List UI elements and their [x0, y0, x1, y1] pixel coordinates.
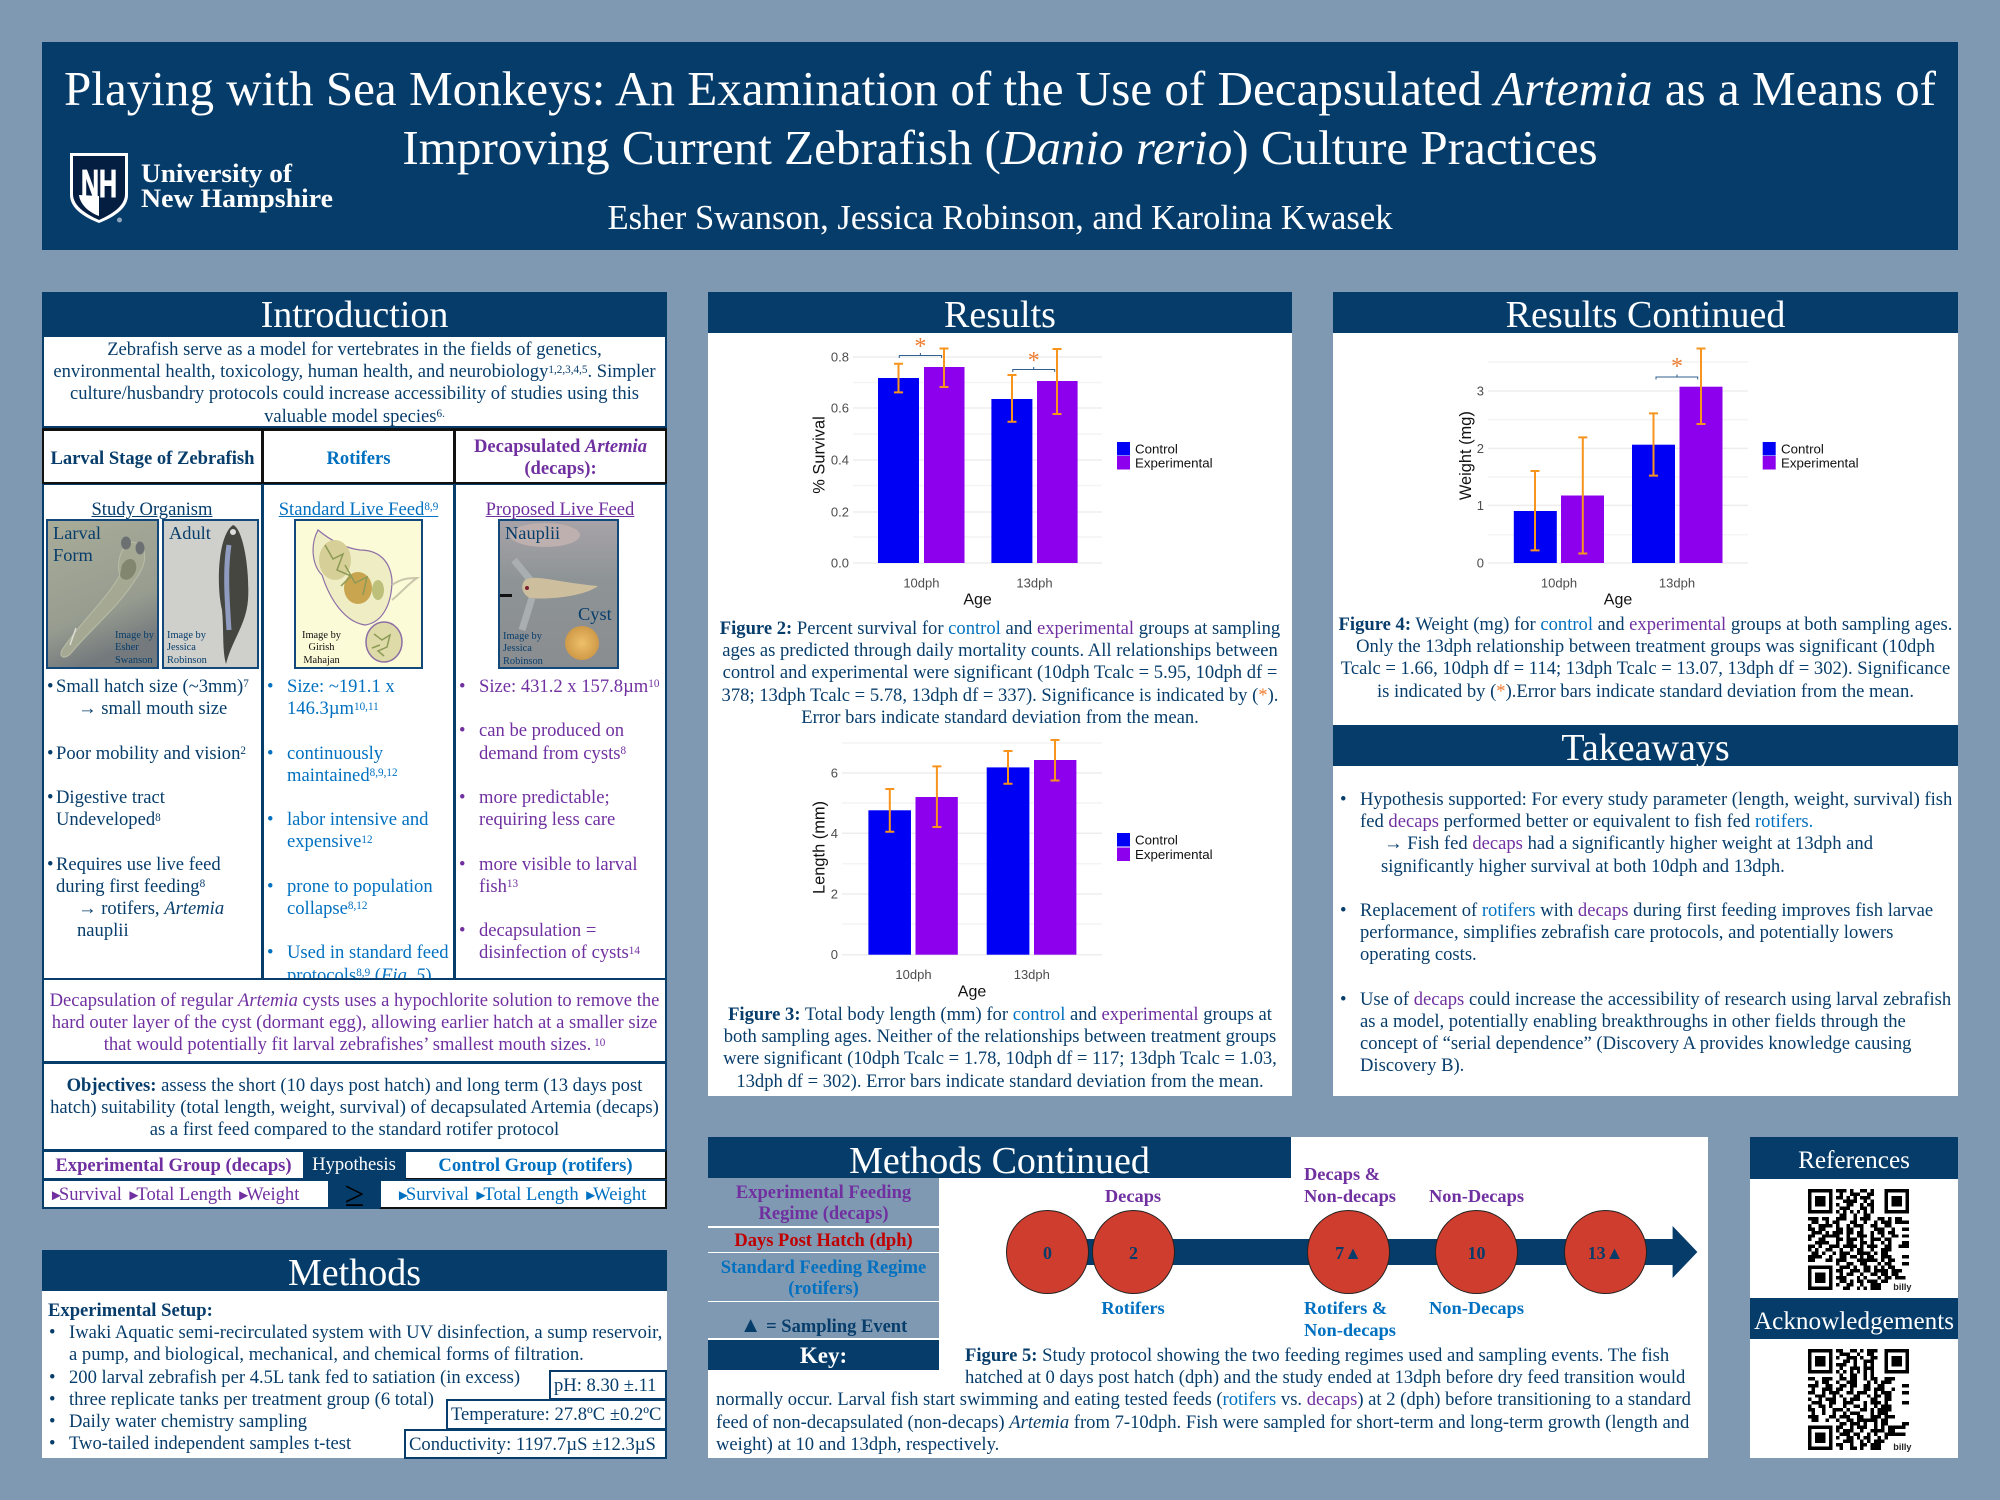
panel: results — [708, 292, 1292, 1096]
experimental group label: Experimental Group (decaps) — [55, 1155, 292, 1176]
logo: University of New Hampshire: University of — [141, 159, 292, 188]
panel: takeaways — [1333, 725, 1958, 1096]
feed label: non-decaps lower: Non-Decaps — [1429, 1298, 1524, 1318]
panel: methods: • — [49, 1433, 56, 1454]
control group label: Control Group (rotifers) — [438, 1155, 633, 1176]
feed label: decaps and non-decaps — [1304, 1164, 1396, 1206]
credit: adult — [167, 630, 207, 666]
heading: introduction — [42, 292, 667, 335]
list: rotifer traits: maintained8,9,12 — [287, 765, 398, 786]
intro paragraph: Zebrafish serve as a model for vertebrates in the fields of genetics, — [107, 339, 602, 360]
experimental setup list: three replicate tanks per treatment group (6 total) — [69, 1389, 434, 1410]
key: heading — [708, 1340, 939, 1370]
takeaways list: as a model, potentially enabling breakthroughs in other fields through the — [1360, 1011, 1906, 1032]
takeaways list: Replacement of rotifers with decaps during first feeding improves fish larvae — [1360, 900, 1933, 921]
chart: survival: Control — [1135, 442, 1178, 456]
chart: survival: 0.2 — [831, 504, 849, 520]
chart: weight: Age — [1604, 592, 1632, 608]
caption: figure 4 — [1338, 614, 1952, 702]
subheading: study organism: Study Organism — [91, 499, 213, 520]
caption: figure 5: Figure 5: Study protocol showing the two feeding regimes used and sampling events. The fish — [965, 1345, 1669, 1366]
heading: methods continued: Methods Continued — [849, 1140, 1150, 1182]
credit: rotifer: Girish — [308, 642, 334, 653]
takeaways list: Hypothesis supported: For every study parameter (length, weight, survival) fish — [1360, 789, 1952, 810]
credit: nauplii: Jessica — [503, 643, 532, 654]
key: sampling event: ▲ = Sampling Event — [740, 1312, 907, 1337]
table column: decaps — [454, 483, 667, 980]
chart: survival: 0.4 — [831, 452, 849, 468]
heading: methods — [42, 1250, 667, 1291]
label: adult: Adult — [169, 523, 211, 543]
key: standard feeding regime: (rotifers) — [788, 1279, 859, 1299]
feed label: non-decaps upper: Non-Decaps — [1429, 1186, 1524, 1206]
panel: introduction: • — [267, 942, 274, 963]
panel: methods: • — [49, 1322, 56, 1343]
chart: weight: Control — [1781, 442, 1824, 456]
caption: figure 3 — [723, 1004, 1277, 1092]
key: sampling event — [708, 1302, 939, 1338]
table header: decaps: Decapsulated Artemia — [474, 436, 647, 457]
water chemistry: conductivity — [404, 1429, 667, 1459]
panel: introduction: • — [47, 854, 54, 875]
takeaways list: Use of decaps could increase the accessibility of research using larval zebrafish — [1360, 989, 1951, 1010]
chart: survival: 0.6 — [831, 400, 849, 416]
objectives text: as a first feed compared to the standard rotifer protocol — [150, 1119, 559, 1140]
list: larval stage traits: → small mouth size — [78, 698, 227, 719]
caption: figure 5: feed of non-decapsulated (non-decaps) Artemia from 7-10dph. Fish were sampled for short-term and long-term growth (length and — [716, 1412, 1689, 1433]
credit: larval — [115, 630, 154, 666]
experimental measures: ►Survival ►Total Length ►Weight — [49, 1184, 299, 1205]
QR code: references: billy — [1893, 1282, 1911, 1292]
list: larval stage traits: Small hatch size (~3mm)7 — [56, 676, 249, 697]
table column: larval stage — [42, 483, 263, 980]
intro paragraph: culture/husbandry protocols could increase accessibility of studies using this — [70, 383, 639, 404]
feed label: decaps and non-decaps: Decaps & — [1304, 1164, 1380, 1184]
panel: takeaways: • — [1340, 900, 1347, 921]
label: cyst: Cyst — [578, 604, 612, 624]
QR code: acknowledgements — [1808, 1349, 1912, 1452]
table header: larval stage: Larval Stage of Zebrafish — [50, 448, 254, 469]
experimental setup list: Two-tailed independent samples t-test — [69, 1433, 351, 1454]
feed label: decaps and non-decaps: Non-decaps — [1304, 1186, 1396, 1206]
credit: rotifer: Image by — [302, 630, 341, 641]
caption: figure 4: Tcalc = 1.66, 10dph df = 114; 13dph Tcalc = 13.07, 13dph df = 302). Significance — [1341, 658, 1950, 679]
timeline: day 13: 13▲ — [1588, 1243, 1623, 1263]
list: decap traits: disinfection of cysts14 — [479, 942, 640, 963]
QR code: acknowledgements: billy — [1893, 1442, 1911, 1452]
chart: length: 10dph — [895, 967, 932, 982]
banner — [42, 42, 1958, 250]
credit: nauplii: Image by — [503, 631, 542, 642]
chart: weight: Experimental — [1781, 456, 1859, 470]
chart: survival: * — [1028, 348, 1040, 374]
timeline: day 7: 7▲ — [1335, 1243, 1362, 1263]
panel: introduction — [42, 292, 667, 1214]
credit: larval: Swanson — [115, 655, 153, 666]
control measures — [379, 1179, 667, 1209]
intro paragraph — [53, 339, 656, 427]
heading: introduction: Introduction — [261, 294, 448, 336]
list: rotifer traits: collapse8,12 — [287, 898, 367, 919]
table header: decaps — [454, 428, 667, 484]
list: larval stage traits: Digestive tract — [56, 787, 165, 808]
label: nauplii: Nauplii — [505, 523, 560, 543]
image labels — [53, 523, 101, 565]
timeline: day 0: 0 — [1043, 1243, 1052, 1263]
heading: results continued — [1333, 292, 1958, 333]
list: larval stage traits: Poor mobility and vision2 — [56, 743, 246, 764]
logo: University of New Hampshire: NH — [81, 163, 117, 206]
list: larval stage traits: nauplii — [77, 920, 129, 941]
intro paragraph: environmental health, toxicology, human health, and neurobiology1,2,3,4,5. Simpler — [53, 361, 656, 382]
chart: length: 0 — [831, 947, 838, 962]
panel: methods — [42, 1250, 667, 1458]
panel: results continued — [1333, 292, 1958, 725]
title — [64, 60, 1936, 174]
panel: introduction: • — [267, 676, 274, 697]
chart: survival: 10dph — [903, 576, 939, 590]
heading: references — [1750, 1137, 1958, 1179]
experimental setup list: 200 larval zebrafish per 4.5L tank fed to satiation (in excess) — [69, 1367, 520, 1388]
intro text — [42, 335, 667, 428]
list: decap traits: more predictable; — [479, 787, 610, 808]
takeaways list: concept of “serial dependence” (Discovery A provides knowledge causing — [1360, 1033, 1911, 1054]
list: larval stage traits — [47, 676, 249, 941]
caption: figure 4: is indicated by (*).Error bars indicate standard deviation from the mean. — [1377, 681, 1914, 702]
list: rotifer traits: protocols8,9 (Fig. 5) — [287, 965, 432, 986]
caption: figure 3: both sampling ages. Neither of the relationships between treatment groups — [724, 1026, 1276, 1047]
list: larval stage traits: → rotifers, Artemia — [78, 898, 224, 919]
list: decap traits: can be produced on — [479, 720, 624, 741]
caption: figure 4: Only the 13dph relationship between treatment groups was significant (10dph — [1356, 636, 1935, 657]
list: larval stage traits: during first feeding8 — [56, 876, 205, 897]
chart: weight: 3 — [1477, 384, 1484, 398]
chart: length: Age — [958, 983, 986, 1000]
feed label: rotifers and non-decaps: Rotifers & — [1304, 1298, 1387, 1318]
takeaways list: Discovery B). — [1360, 1055, 1464, 1076]
panel: introduction: • — [459, 787, 466, 808]
caption: figure 5: normally occur. Larval fish start swimming and eating tested feeds (rotifers vs. decaps) at 2 (dph) before transitioning to a standard — [716, 1389, 1691, 1410]
timeline: day 2 — [1092, 1210, 1175, 1294]
water chemistry: temperature: Temperature: 27.8ºC ±0.2ºC — [451, 1404, 661, 1425]
caption: figure 3: 13dph df = 302). Error bars indicate standard deviation from the mean. — [736, 1071, 1264, 1092]
panel: introduction: • — [459, 676, 466, 697]
heading: references: References — [1798, 1147, 1910, 1174]
chart: survival: Age — [963, 592, 992, 608]
chart: weight: 1 — [1477, 498, 1484, 513]
subheading: proposed live feed: Proposed Live Feed — [486, 499, 634, 520]
caption: figure 3: were significant (10dph Tcalc = 1.78, 10dph df = 117; 13dph Tcalc = 1.03, — [723, 1048, 1277, 1069]
greater-or-equal symbol — [329, 1179, 380, 1209]
chart: survival: 0.8 — [831, 350, 849, 364]
experimental setup list: a pump, and biological, mechanical, and chemical forms of filtration. — [69, 1344, 584, 1365]
heading: results — [708, 292, 1292, 333]
water chemistry: pH — [549, 1370, 667, 1400]
objectives text: hatch) suitability (total length, weight, survival) of decapsulated Artemia (decaps) — [50, 1097, 659, 1118]
feed label: rotifers and non-decaps — [1304, 1298, 1396, 1340]
caption: figure 2: Error bars indicate standard deviation from the mean. — [801, 707, 1199, 728]
hypothesis label — [304, 1150, 404, 1180]
credit: nauplii: Robinson — [503, 656, 543, 667]
experimental setup list: Experimental Setup: — [48, 1300, 213, 1321]
heading: results continued: Results Continued — [1506, 294, 1785, 336]
feed label: rotifers at day 2: Rotifers — [1101, 1298, 1165, 1318]
table header: decaps: (decaps): — [524, 458, 597, 479]
control measures: ►Survival ►Total Length ►Weight — [396, 1184, 646, 1205]
list: larval stage traits: Undeveloped8 — [56, 809, 161, 830]
heading: methods continued — [708, 1137, 1291, 1178]
chart: length: Control — [1135, 832, 1178, 848]
heading: takeaways — [1333, 725, 1958, 766]
greater-or-equal symbol: ≥ — [345, 1174, 364, 1214]
title: Playing with Sea Monkeys: An Examination of the Use of Decapsulated Artemia as a Means of — [64, 60, 1936, 116]
water chemistry: pH: pH: 8.30 ±.11 — [554, 1375, 656, 1396]
takeaways list: significantly higher survival at both 10dph and 13dph. — [1381, 856, 1785, 877]
heading: results: Results — [944, 294, 1056, 336]
QR code: references — [1808, 1189, 1912, 1292]
takeaways list — [1340, 789, 1952, 1076]
authors: Esher Swanson, Jessica Robinson, and Karolina Kwasek — [607, 199, 1393, 237]
experimental group label — [42, 1150, 305, 1180]
list: decap traits: demand from cysts8 — [479, 743, 626, 764]
caption: figure 5: weight) at 10 and 13dph, respectively. — [716, 1434, 999, 1455]
caption: figure 2 — [720, 618, 1280, 728]
chart: survival: 0.0 — [831, 556, 849, 570]
decapsulation note: Decapsulation of regular Artemia cysts uses a hypochlorite solution to remove the — [50, 990, 659, 1011]
experimental setup list: Daily water chemistry sampling — [69, 1411, 307, 1432]
caption: figure 2: control and experimental were significant (10dph Tcalc = 5.95, 10dph df = — [723, 662, 1277, 683]
list: decap traits: requiring less care — [479, 809, 615, 830]
timeline: day 0 — [1006, 1210, 1089, 1294]
chart: weight: 0 — [1477, 556, 1484, 570]
panel: introduction: • — [47, 787, 54, 808]
table header: rotifers: Rotifers — [326, 448, 391, 469]
panel: takeaways: • — [1340, 989, 1347, 1010]
key: experimental feeding regime — [708, 1178, 939, 1226]
takeaways list: operating costs. — [1360, 944, 1477, 965]
chart: weight: 2 — [1477, 441, 1484, 456]
key: heading: Key: — [800, 1343, 847, 1368]
list: rotifer traits: expensive12 — [287, 831, 373, 852]
timeline: day 13 — [1564, 1210, 1647, 1294]
chart: survival: % Survival — [810, 416, 828, 494]
objectives box — [42, 1062, 667, 1151]
list: rotifer traits — [267, 676, 449, 986]
timeline: day 7 — [1307, 1210, 1390, 1294]
experimental setup list: Iwaki Aquatic semi-recirculated system with UV disinfection, a sump reservoir, — [69, 1322, 662, 1343]
list: decap traits: decapsulation = — [479, 920, 596, 941]
timeline: day 10 — [1435, 1210, 1518, 1294]
list: decap traits: more visible to larval — [479, 854, 638, 875]
experimental setup list — [48, 1300, 662, 1454]
chart: survival: * — [914, 334, 926, 360]
caption: figure 5: hatched at 0 days post hatch (dph) and the study ended at 13dph before dry feed transition would — [965, 1367, 1685, 1388]
chart: weight: Weight (mg) — [1457, 411, 1475, 500]
title: Improving Current Zebrafish (Danio rerio) Culture Practices — [402, 120, 1598, 174]
list: rotifer traits: continuously — [287, 743, 383, 764]
credit: larval: Esher — [115, 642, 139, 653]
water chemistry: conductivity: Conductivity: 1197.7µS ±12.3µS — [409, 1434, 656, 1455]
table column: rotifers — [262, 483, 455, 980]
credit: adult: Robinson — [167, 655, 207, 666]
timeline: day 2: 2 — [1129, 1243, 1138, 1263]
key: experimental feeding regime: Regime (decaps) — [758, 1204, 888, 1224]
caption: figure 2: 378; 13dph Tcalc = 5.78, 13dph df = 337). Significance is indicated by (*). — [722, 685, 1278, 706]
key: standard feeding regime — [708, 1253, 939, 1301]
heading: methods: Methods — [288, 1252, 421, 1294]
panel: introduction: • — [267, 743, 274, 764]
takeaways list: fed decaps performed better or equivalent to fish fed rotifers. — [1360, 811, 1813, 832]
water chemistry: temperature — [446, 1399, 667, 1430]
panel: references — [1750, 1137, 1958, 1298]
objectives text — [50, 1075, 659, 1140]
panel: methods: • — [49, 1389, 56, 1410]
panel: introduction: • — [459, 854, 466, 875]
chart: length: 4 — [831, 826, 838, 841]
list: decap traits — [459, 676, 659, 963]
credit: adult: Image by — [167, 630, 206, 641]
panel: introduction: • — [459, 720, 466, 741]
decapsulation note box — [42, 978, 667, 1063]
caption: figure 2: ages as predicted through daily mortality counts. All relationships between — [722, 640, 1278, 661]
chart: length: 6 — [831, 766, 838, 780]
panel: introduction: • — [459, 920, 466, 941]
decapsulation note: that would potentially fit larval zebrafishes’ smallest mouth sizes. 10 — [104, 1034, 605, 1055]
chart: weight: 10dph — [1541, 576, 1577, 590]
heading: acknowledgements — [1750, 1298, 1958, 1339]
chart: survival: Experimental — [1135, 456, 1213, 470]
list: rotifer traits: prone to population — [287, 876, 433, 897]
experimental measures — [42, 1179, 330, 1209]
list: decap traits: Size: 431.2 x 157.8µm10 — [479, 676, 659, 697]
chart: length: 13dph — [1014, 967, 1050, 982]
caption: figure 3: Figure 3: Total body length (mm) for control and experimental groups at — [728, 1004, 1272, 1025]
credit: larval: Image by — [115, 630, 154, 641]
panel: methods: • — [49, 1367, 56, 1388]
takeaways list: performance, simplifies zebrafish care protocols, and potentially lowers — [1360, 922, 1893, 943]
panel: introduction: • — [267, 809, 274, 830]
chart: survival: 13dph — [1016, 576, 1053, 590]
list: rotifer traits: Size: ~191.1 x — [287, 676, 395, 697]
chart: length: Experimental — [1135, 847, 1213, 862]
caption: figure 4: Figure 4: Weight (mg) for control and experimental groups at both sampling ages. — [1339, 614, 1952, 635]
objectives text: Objectives: assess the short (10 days post hatch) and long term (13 days post — [67, 1075, 642, 1096]
panel: introduction: • — [47, 676, 54, 697]
key: experimental feeding regime: Experimental Feeding — [736, 1183, 911, 1203]
panel: acknowledgements — [1750, 1298, 1958, 1458]
chart: weight: * — [1671, 354, 1683, 380]
credit: nauplii — [503, 631, 543, 667]
list: rotifer traits: labor intensive and — [287, 809, 428, 830]
key: days post hatch: Days Post Hatch (dph) — [734, 1231, 913, 1251]
key: standard feeding regime: Standard Feeding Regime — [721, 1258, 926, 1278]
panel: takeaways: • — [1340, 789, 1347, 810]
panel: introduction: • — [267, 876, 274, 897]
feed label: rotifers and non-decaps: Non-decaps — [1304, 1320, 1396, 1340]
timeline: day 10: 10 — [1468, 1243, 1486, 1263]
key: days post hatch — [708, 1228, 939, 1252]
control group label — [404, 1150, 667, 1180]
feed label: decaps at day 2: Decaps — [1105, 1186, 1161, 1206]
credit: rotifer: Mahajan — [303, 655, 340, 666]
panel: methods continued — [708, 1137, 1708, 1458]
decapsulation note — [50, 990, 659, 1055]
intro paragraph: valuable model species6. — [264, 406, 445, 427]
decapsulation note: hard outer layer of the cyst (dormant egg), allowing earlier hatch at a smaller size — [52, 1012, 657, 1033]
caption: figure 5 — [716, 1345, 1691, 1455]
list: decap traits: fish13 — [479, 876, 518, 897]
chart: length: 2 — [831, 886, 838, 902]
subheading: standard live feed: Standard Live Feed8,9 — [279, 499, 438, 520]
credit: rotifer — [302, 630, 341, 666]
list: larval stage traits: Requires use live feed — [56, 854, 221, 875]
image labels: Larval — [53, 523, 101, 543]
table header: rotifers — [262, 428, 455, 484]
caption: figure 2: Figure 2: Percent survival for control and experimental groups at sampling — [720, 618, 1280, 639]
heading: acknowledgements: Acknowledgements — [1754, 1308, 1954, 1335]
list: rotifer traits: 146.3µm10,11 — [287, 698, 379, 719]
heading: takeaways: Takeaways — [1561, 727, 1730, 769]
chart: length: Length (mm) — [810, 801, 828, 894]
table header: larval stage — [42, 428, 263, 484]
hypothesis label: Hypothesis — [312, 1154, 396, 1175]
logo: University of New Hampshire: New Hampshire — [141, 184, 333, 213]
panel: introduction: • — [47, 743, 54, 764]
chart: weight: 13dph — [1659, 576, 1695, 590]
list: rotifer traits: Used in standard feed — [287, 942, 449, 963]
credit: adult: Jessica — [167, 642, 196, 653]
takeaways list: → Fish fed decaps had a significantly higher weight at 13dph and — [1384, 833, 1873, 854]
panel: methods: • — [49, 1411, 56, 1432]
image labels: Form — [53, 545, 93, 565]
